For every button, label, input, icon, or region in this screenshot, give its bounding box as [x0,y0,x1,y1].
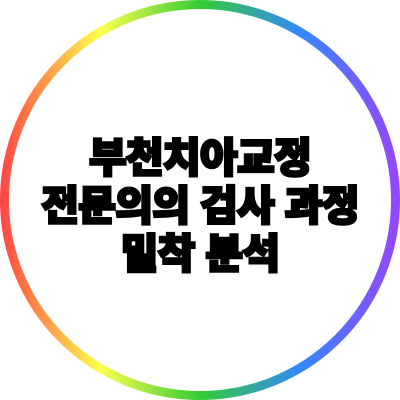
title: 밀착 분석 [121,230,279,276]
title [40,134,359,276]
title: 부천치아교정 [89,134,311,180]
title: 전문의의 검사 과정 [41,182,359,228]
